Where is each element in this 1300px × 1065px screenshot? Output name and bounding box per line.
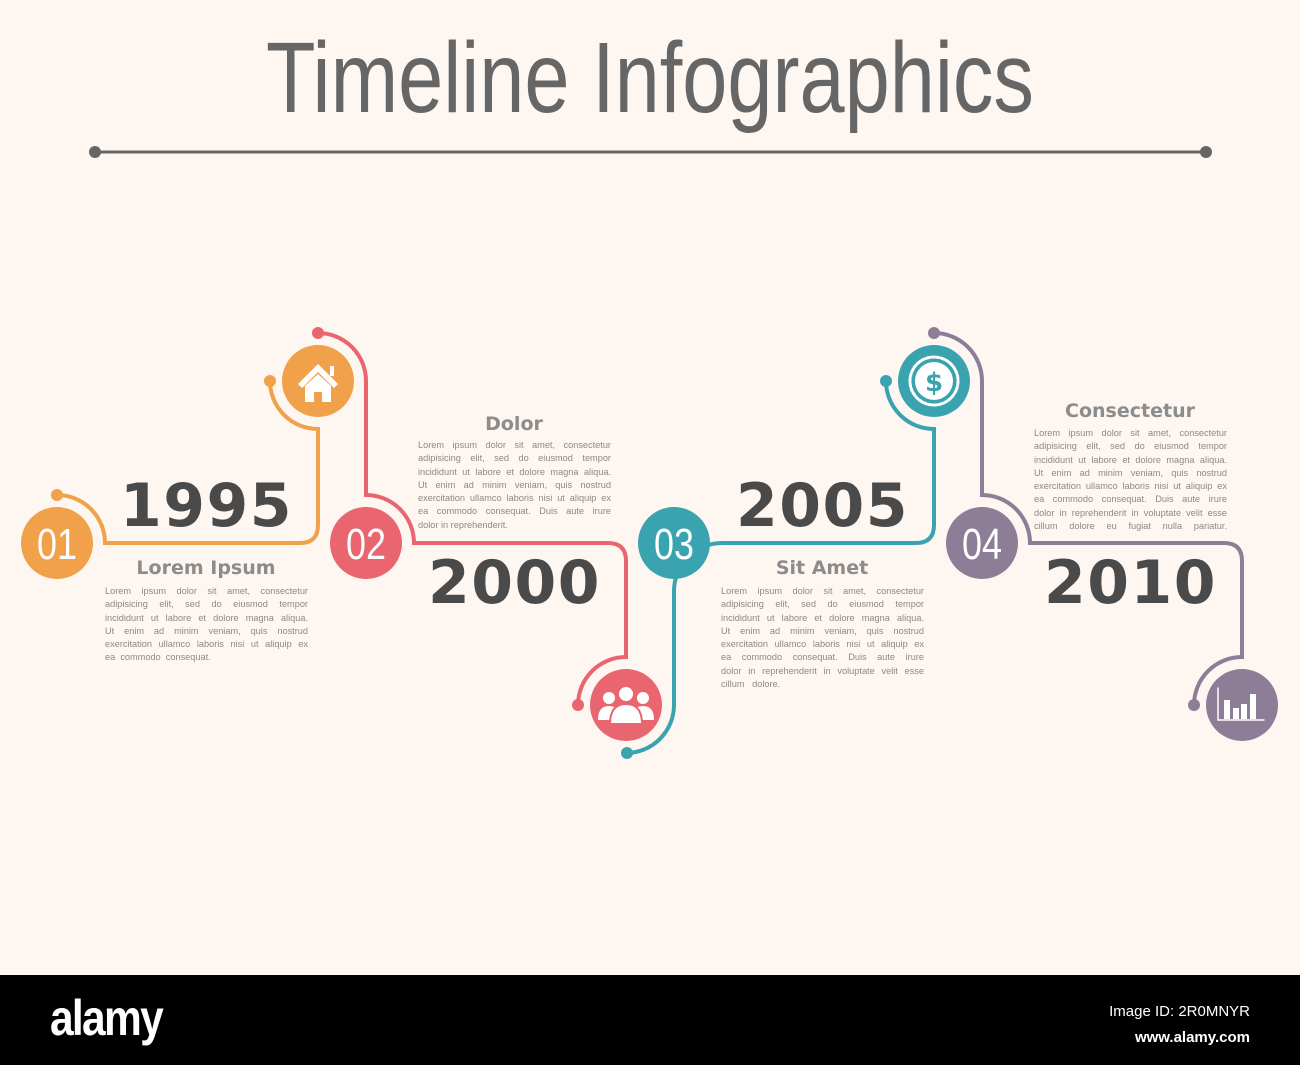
icon: dollar: $ [925, 368, 943, 398]
text: Consectetur: Ut enim ad minim veniam, quis nostrud [1034, 468, 1227, 478]
text: Dolor: adipisicing elit, sed do eiusmod tempor [418, 453, 611, 463]
text: Lorem Ipsum [105, 586, 308, 662]
icon: house [282, 345, 354, 417]
text: Sit Amet: incididunt ut labore et dolore magna aliqua. [721, 613, 924, 623]
text: Dolor: exercitation ullamco laboris nisi ut aliquip ex [418, 493, 611, 503]
text: Sit Amet: Ut enim ad minim veniam, quis nostrud [721, 626, 924, 636]
text: Consectetur: incididunt ut labore et dolore magna aliqua. [1034, 455, 1227, 465]
year 2005: 2005 [736, 471, 909, 541]
text: Sit Amet: adipisicing elit, sed do eiusmod tempor [721, 599, 924, 609]
footer id: www.alamy.com [1135, 1029, 1250, 1046]
footer logo: alamy [50, 990, 162, 1046]
text: Dolor: ea commodo consequat. Duis aute irure [418, 506, 611, 516]
heading: Sit Amet: Sit Amet [776, 557, 868, 579]
icon: chart [1206, 669, 1278, 741]
text: Dolor: Lorem ipsum dolor sit amet, consectetur [418, 440, 611, 450]
icon: people [590, 669, 662, 741]
step circles [21, 507, 1018, 579]
text: Dolor: Ut enim ad minim veniam, quis nostrud [418, 480, 611, 490]
text: Consectetur: Lorem ipsum dolor sit amet, consectetur [1034, 428, 1227, 438]
text: Lorem Ipsum: adipisicing elit, sed do eiusmod tempor [105, 599, 308, 609]
text: Sit Amet: ea commodo consequat. Duis aute irure [721, 652, 924, 662]
year 1995: 1995 [120, 471, 293, 541]
text: Dolor: incididunt ut labore et dolore magna aliqua. [418, 467, 611, 477]
text: Lorem Ipsum: ea commodo consequat. [105, 652, 211, 662]
text: Consectetur: adipisicing elit, sed do eiusmod tempor [1034, 441, 1227, 451]
text: Lorem Ipsum: exercitation ullamco laboris nisi ut aliquip ex [105, 639, 308, 649]
text: Dolor [418, 440, 611, 530]
text: Sit Amet: Lorem ipsum dolor sit amet, consectetur [721, 586, 924, 596]
icon: dollar [898, 345, 970, 417]
heading: Dolor: Dolor [485, 413, 543, 435]
text: Sit Amet: dolor in reprehenderit in voluptate velit esse [721, 666, 924, 676]
footer bar [0, 975, 1300, 1065]
step circles: 04 [962, 520, 1002, 569]
path: orange [51, 375, 318, 543]
text: Consectetur: dolor in reprehenderit in voluptate velit esse [1034, 508, 1227, 518]
step circles: 02 [346, 520, 386, 569]
footer id [1109, 1003, 1250, 1046]
path: red [312, 327, 626, 711]
text: Sit Amet [721, 586, 924, 689]
heading: Lorem Ipsum: Lorem Ipsum [136, 557, 276, 579]
title: Timeline Infographics [266, 22, 1034, 134]
text: Consectetur: ea commodo consequat. Duis aute irure [1034, 494, 1227, 504]
text: Sit Amet: exercitation ullamco laboris nisi ut aliquip ex [721, 639, 924, 649]
step circles: 01 [37, 520, 77, 569]
text: Consectetur: cillum dolore eu fugiat nulla pariatur. [1034, 521, 1227, 531]
path: purple [928, 327, 1242, 711]
text: Lorem Ipsum: Ut enim ad minim veniam, quis nostrud [105, 626, 308, 636]
text: Sit Amet: cillum dolore. [721, 679, 780, 689]
text: Lorem Ipsum: incididunt ut labore et dolore magna aliqua. [105, 613, 308, 623]
text: Dolor: dolor in reprehenderit. [418, 520, 508, 530]
text: Consectetur [1034, 428, 1227, 531]
path: teal [621, 375, 934, 759]
year 2010: 2010 [1044, 548, 1217, 618]
text: Consectetur: exercitation ullamco laboris nisi ut aliquip ex [1034, 481, 1227, 491]
footer id: Image ID: 2R0MNYR [1109, 1003, 1250, 1020]
step circles: 03 [654, 520, 694, 569]
heading: Consectetur: Consectetur [1065, 400, 1195, 422]
title [89, 22, 1212, 158]
text: Lorem Ipsum: Lorem ipsum dolor sit amet, consectetur [105, 586, 308, 596]
year 2000: 2000 [428, 548, 601, 618]
